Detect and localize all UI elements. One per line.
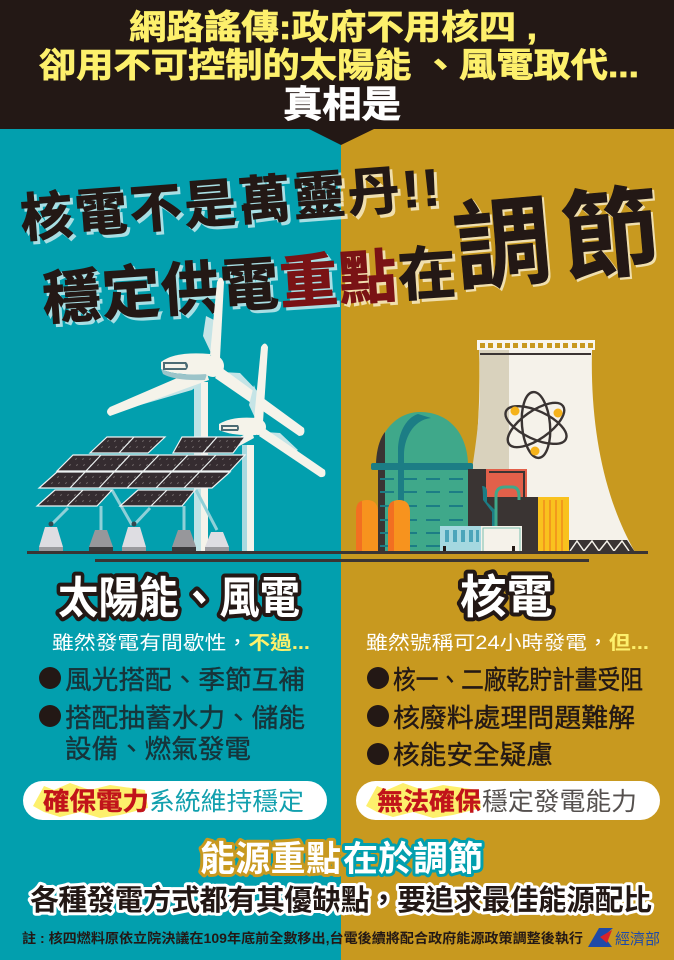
background: gold right panel xyxy=(341,125,674,960)
reactor dome xyxy=(371,412,473,552)
callout pill xyxy=(356,781,660,820)
title shadow: right side xyxy=(341,169,656,308)
bullet list xyxy=(39,665,305,764)
auxiliary buildings xyxy=(440,469,569,552)
icon: wind turbines xyxy=(107,278,325,552)
title shadow: right side: 核電不是萬靈丹!! xyxy=(21,162,445,252)
panel: solar and wind xyxy=(23,574,327,820)
conclusion text: 各種發電方式都有其優缺點，要追求最佳能源配比 xyxy=(30,884,652,917)
bullet list: 核一、二廠乾貯計畫受阻 xyxy=(393,665,643,695)
title emphasis: adjust: 調節 xyxy=(449,176,664,304)
panel feet xyxy=(39,522,229,552)
logo: ministry of economic affairs xyxy=(588,928,660,948)
ground lines xyxy=(27,551,648,562)
title shadow: right side: 穩定供電重點在 xyxy=(44,243,461,335)
conclusion heading: 能源重點 xyxy=(200,840,341,879)
cooling tower xyxy=(465,340,635,552)
title shadow: left side: 核電不是萬靈丹!! xyxy=(21,162,445,252)
main title xyxy=(18,159,666,335)
intro line: 雖然號稱可24小時發電， 但... xyxy=(366,632,649,654)
logo mark xyxy=(588,928,613,947)
heading: solar and wind: 太陽能、風電 xyxy=(58,574,300,623)
atom symbol xyxy=(500,391,572,459)
rumor heading: 網路謠傳:政府不用核四 , xyxy=(129,9,537,47)
title shadow: right side: 調節 xyxy=(451,178,666,306)
title line two: 穩定供電重點在 xyxy=(41,240,458,332)
orange tanks xyxy=(356,500,410,552)
conclusion heading: 在於調節 xyxy=(343,840,483,879)
icon: nuclear plant xyxy=(356,340,635,552)
title shadow: left side xyxy=(24,172,341,328)
panel surfaces xyxy=(37,437,245,506)
top black banner xyxy=(0,0,674,145)
rumor heading xyxy=(39,9,639,85)
title line one: 核電不是萬靈丹!! xyxy=(18,159,442,249)
title shadow: left side: 穩定供電重點在 xyxy=(44,243,461,335)
icon: solar panels xyxy=(37,437,245,552)
bullet list: 風光搭配、季節互補 xyxy=(65,665,305,695)
callout pill: 穩定發電能力 xyxy=(482,788,637,816)
bullet list xyxy=(367,665,643,770)
bullet list: 搭配抽蓄水力、儲能 xyxy=(65,703,305,733)
heading: nuclear: 核電 xyxy=(460,571,553,623)
callout pill: 無法確保 xyxy=(377,787,481,816)
panel: nuclear xyxy=(356,571,660,820)
panel cell dividers xyxy=(67,437,217,506)
large turbine xyxy=(107,278,304,552)
conclusion heading xyxy=(200,840,483,879)
callout pill: 確保電力 xyxy=(43,788,149,816)
background: teal left panel xyxy=(0,125,341,960)
bullet list: 設備、燃氣發電 xyxy=(65,734,251,764)
bullet list: 核能安全疑慮 xyxy=(393,740,553,770)
truth label: 真相是 xyxy=(283,84,401,125)
intro line: 雖然發電有間歇性， 不過... xyxy=(52,632,310,654)
bullet list: 核廢料處理問題難解 xyxy=(393,703,635,733)
footnote: 註 : 核四燃料原依立院決議在109年底前全數移出,台電後續將配合政府能源政策調整後執行 xyxy=(22,930,583,946)
callout pill xyxy=(23,781,327,820)
rumor heading: 卻用不可控制的太陽能 、風電取代... xyxy=(39,47,639,85)
panel supports xyxy=(51,490,217,530)
small turbine xyxy=(219,344,325,552)
callout pill: 系統維持穩定 xyxy=(149,788,304,816)
logo name: 經濟部 xyxy=(615,931,660,948)
